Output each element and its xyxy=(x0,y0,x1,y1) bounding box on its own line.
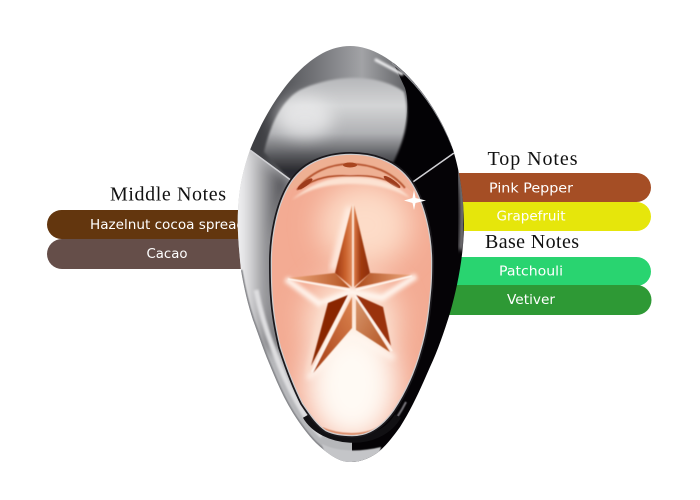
bar: Cacao xyxy=(47,239,270,269)
right dome rim xyxy=(392,63,453,148)
bar: Grapefruit: Grapefruit xyxy=(496,210,566,224)
bar: Vetiver: Vetiver xyxy=(507,293,556,308)
glass top inner copper band xyxy=(300,176,400,189)
band end right xyxy=(384,176,400,188)
bottom dark crescent xyxy=(306,416,398,439)
band centre mark xyxy=(343,162,357,168)
bottom silver highlight xyxy=(322,445,382,462)
right rim reflection xyxy=(459,170,462,250)
bar: Cacao: Cacao xyxy=(146,247,188,262)
sparkle xyxy=(404,190,426,210)
glass top zone xyxy=(345,155,396,181)
perfume bottle xyxy=(238,46,464,462)
left shoulder gradient xyxy=(238,151,290,356)
band end left xyxy=(298,178,312,190)
window dark rim xyxy=(272,155,431,435)
cap bright glow xyxy=(277,98,333,138)
lower right rim reflection xyxy=(396,401,408,416)
heading: Top Notes: Top Notes xyxy=(488,148,578,170)
bar: Patchouli xyxy=(430,257,651,286)
upper peach glow xyxy=(319,183,411,267)
glass window xyxy=(272,155,431,435)
window pale rim xyxy=(272,155,431,435)
bar: Vetiver xyxy=(430,285,652,315)
bar: Hazelnut cocoa spread: Hazelnut cocoa spread xyxy=(90,218,245,233)
heading: Base Notes: Base Notes xyxy=(485,231,579,253)
band pale fill under xyxy=(292,177,410,200)
bar: Patchouli: Patchouli xyxy=(499,264,563,280)
right black side xyxy=(352,140,472,470)
bar: Grapefruit xyxy=(430,202,651,231)
star halo arms xyxy=(286,276,416,304)
left outer edge shade xyxy=(241,270,350,462)
star halo left leg xyxy=(322,304,324,306)
left silver body xyxy=(230,140,360,470)
star halo legs xyxy=(306,348,396,380)
cap seams xyxy=(250,150,454,184)
top highlight xyxy=(376,60,402,74)
cap dome xyxy=(250,46,454,179)
glass fill xyxy=(272,155,431,435)
heading: Middle Notes: Middle Notes xyxy=(110,184,226,206)
centre peach glow xyxy=(306,275,398,365)
bottom copper edge xyxy=(322,428,378,434)
glass top outer copper band xyxy=(297,164,405,190)
cap light panel xyxy=(264,78,407,180)
cap black panel xyxy=(390,62,454,181)
star halo top xyxy=(333,207,350,270)
left lower pale band xyxy=(256,290,322,436)
star emblem xyxy=(288,205,412,373)
bright lower glow xyxy=(306,327,398,443)
bar: Pink Pepper: Pink Pepper xyxy=(489,182,574,196)
bar: Hazelnut cocoa spread xyxy=(47,210,270,239)
bar: Pink Pepper xyxy=(430,173,651,202)
